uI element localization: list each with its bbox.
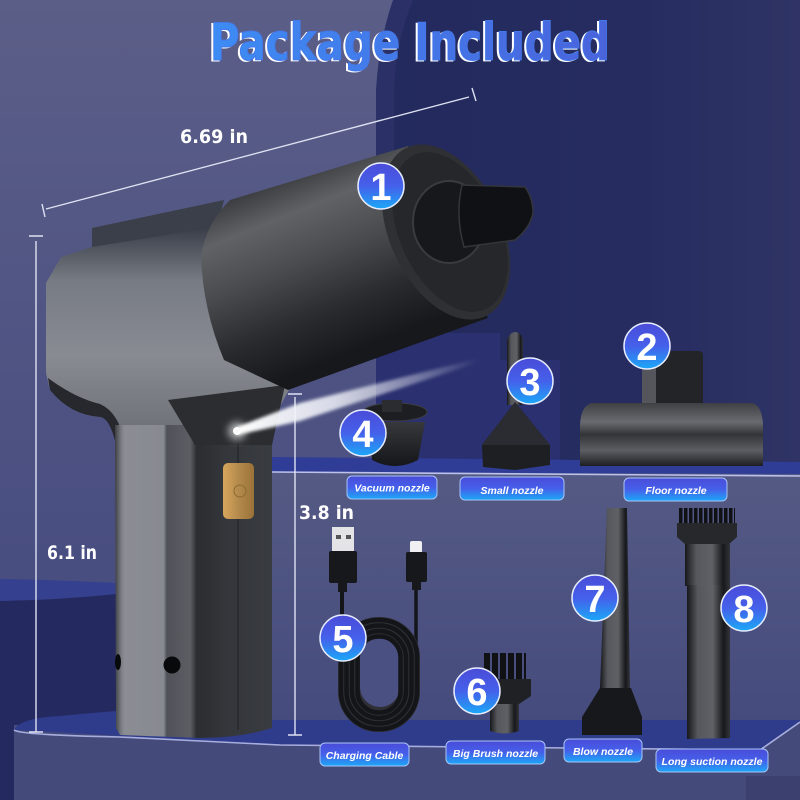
podium edge line: [14, 722, 800, 750]
canister end cap rim: [356, 124, 536, 340]
badge 3: [507, 358, 553, 404]
tool: long suction nozzle: [677, 516, 737, 739]
badge 6: 6: [466, 672, 488, 714]
shelf edge: [272, 472, 800, 476]
label: Charging Cable: Charging Cable: [326, 750, 403, 762]
background: inner arch: [394, 0, 800, 462]
label: Charging Cable: [320, 743, 409, 766]
badge 4: [340, 410, 386, 456]
label: Big Brush nozzle: Big Brush nozzle: [453, 748, 538, 760]
tool: charging cable: [329, 527, 427, 732]
background: dark blocks behind tools: [376, 333, 560, 460]
handle seam: [237, 432, 239, 730]
badge 7: 7: [584, 579, 606, 621]
LED beam: [237, 358, 480, 435]
left dark panel: [0, 594, 116, 725]
shelf surface: [272, 457, 800, 474]
rear bracket: [92, 200, 224, 250]
tool: vacuum nozzle: [363, 400, 427, 466]
label: Floor nozzle: Floor nozzle: [645, 485, 707, 497]
badge 2: [624, 323, 670, 369]
screw holes: [164, 656, 180, 674]
housing lower shadow: [48, 378, 124, 445]
label: Long suction nozzle: [656, 749, 768, 772]
handle: [115, 425, 272, 738]
badge 7: [572, 575, 618, 621]
badge 5: [320, 615, 366, 661]
label: Blow nozzle: [564, 739, 642, 762]
nozzle collar: [413, 181, 485, 263]
background: dark arch panel: [376, 0, 800, 462]
motor housing: [46, 228, 290, 440]
dimension: width 6.69 in: 6.69 in: [180, 126, 248, 148]
LED glow: [228, 422, 246, 440]
nozzle mouth: [459, 185, 533, 247]
label: Vacuum nozzle: [347, 476, 437, 499]
badge 8: [721, 585, 767, 631]
badge 6: [454, 668, 500, 714]
label: Big Brush nozzle: [446, 741, 545, 764]
button icon: [234, 485, 246, 497]
podium corner shade: [746, 776, 800, 800]
label: Small nozzle: Small nozzle: [480, 485, 544, 497]
dimension: handle 3.8 in: [288, 394, 354, 735]
label: Small nozzle: [460, 477, 564, 500]
label: Long suction nozzle: Long suction nozzle: [662, 756, 763, 768]
podium top surface: [14, 711, 800, 750]
dimension: handle 3.8 in: 3.8 in: [299, 502, 354, 524]
badge 1: [358, 163, 404, 209]
vacuum body: [46, 124, 536, 738]
left of podium: [0, 725, 14, 800]
label: Vacuum nozzle: Vacuum nozzle: [354, 482, 430, 494]
dimension: height 6.1 in: 6.1 in: [47, 542, 97, 564]
title: Package Included: [210, 13, 610, 73]
dust canister: [201, 146, 488, 390]
dimension: height 6.1 in: [29, 236, 97, 732]
badge 5: 5: [332, 619, 354, 661]
left blue band: [0, 579, 116, 601]
neck shadow: [168, 385, 285, 445]
power button: [223, 463, 254, 519]
badge 1: 1: [370, 167, 392, 209]
badge 2: 2: [636, 327, 658, 369]
tool: big brush nozzle: [480, 667, 531, 734]
background: lower wall: [272, 470, 800, 720]
canister end cap: [369, 134, 531, 330]
badge 3: 3: [519, 362, 541, 404]
badge 4: 4: [352, 414, 374, 456]
tool: floor nozzle: [580, 351, 763, 466]
background: lilac block near shelf: [272, 360, 376, 462]
label: Floor nozzle: [624, 478, 727, 501]
tool: blow nozzle: [582, 508, 642, 735]
badge 8: 8: [733, 589, 755, 631]
podium front: [14, 722, 800, 800]
tool: small nozzle: [482, 332, 550, 470]
label: Blow nozzle: Blow nozzle: [573, 746, 633, 758]
LED light: [233, 427, 241, 435]
dimension: width 6.69 in: [42, 88, 476, 217]
